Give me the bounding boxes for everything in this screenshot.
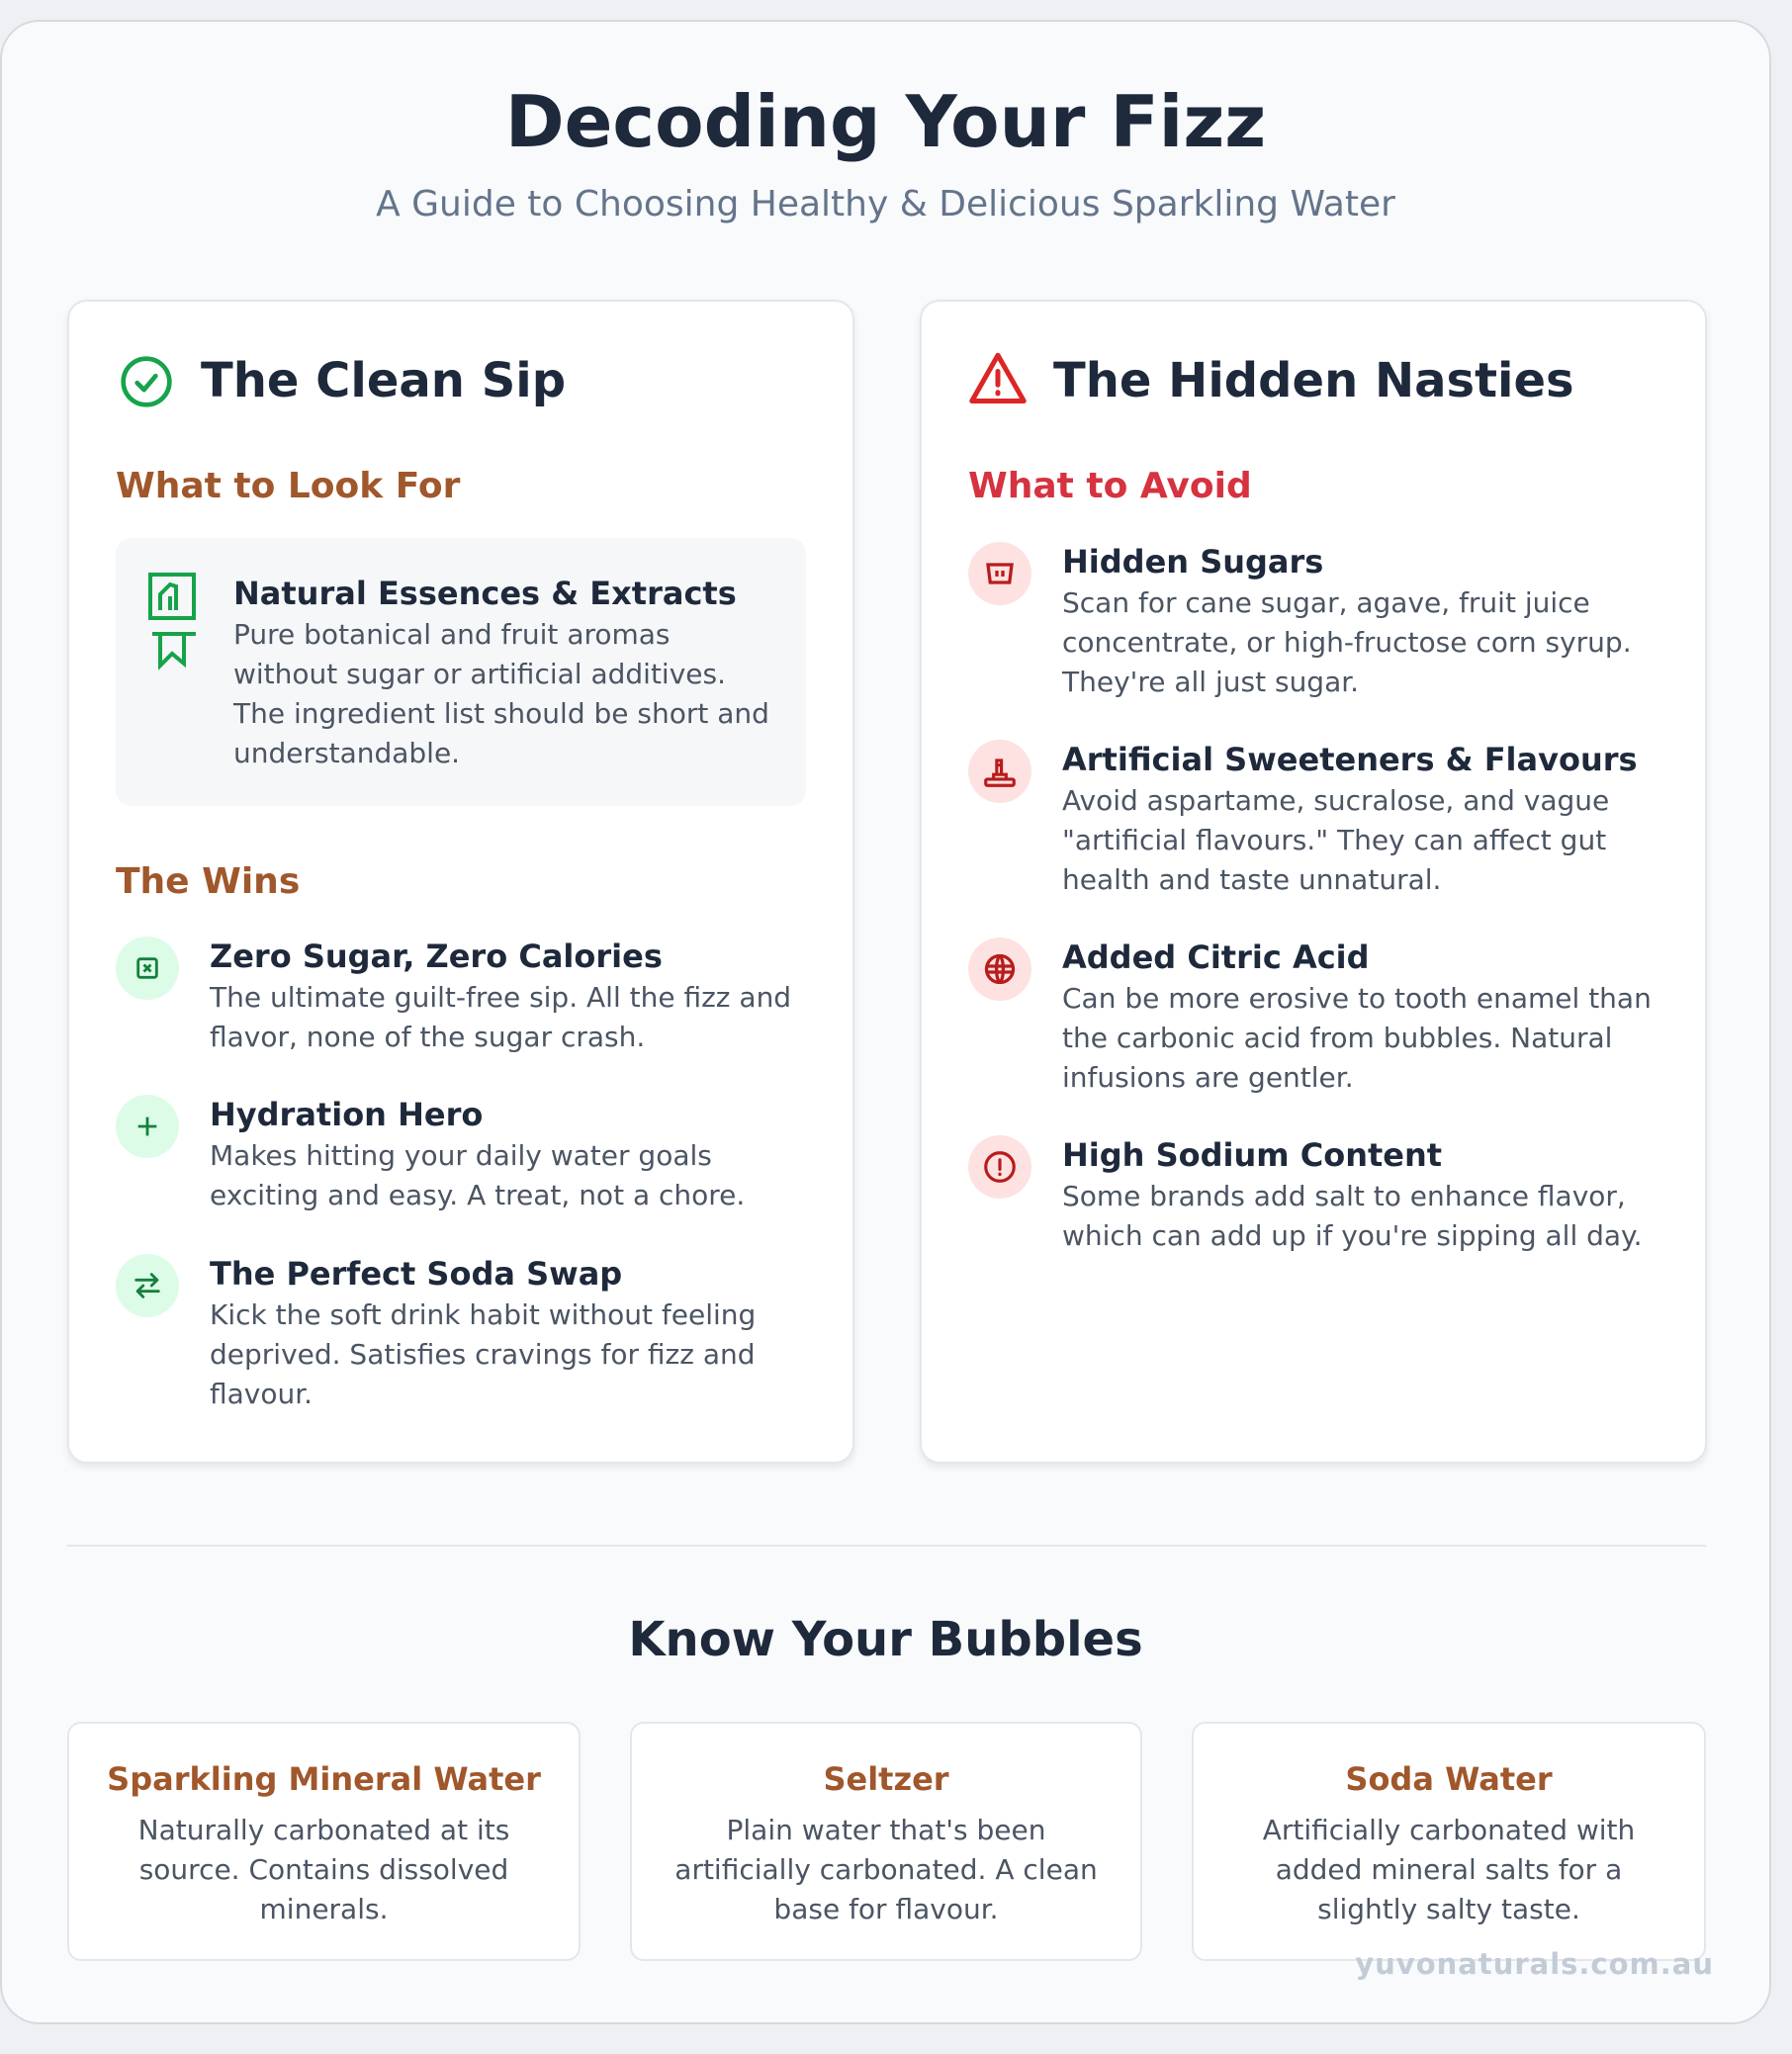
avoid: hidden sugars <box>968 542 1632 698</box>
icon: swap arrows <box>116 1254 179 1317</box>
icon: leaf bookmark <box>148 573 196 670</box>
subtitle: A Guide to Choosing Healthy & Delicious Sparkling Water <box>376 184 1395 224</box>
avoid: citric acid <box>968 938 1652 1094</box>
win: hydration hero: Hydration Hero <box>210 1096 483 1133</box>
subheading: what to avoid: What to Avoid <box>968 466 1252 506</box>
win: soda swap: Kick the soft drink habit without feeling deprived. Satisfies cravings for fizz and flavour. <box>210 1298 756 1410</box>
icon: x box <box>116 937 179 1000</box>
win: hydration hero: Makes hitting your daily water goals exciting and easy. A treat, not a chore. <box>210 1139 745 1211</box>
subheading: the wins: The Wins <box>116 861 300 902</box>
icon: basket <box>968 542 1031 605</box>
win: zero sugar: Zero Sugar, Zero Calories <box>210 938 663 975</box>
win: zero sugar: The ultimate guilt-free sip. All the fizz and flavor, none of the sugar crash. <box>210 981 791 1053</box>
win: zero sugar <box>116 937 791 1053</box>
icon: alert circle <box>968 1135 1031 1199</box>
card: seltzer: Plain water that's been artificially carbonated. A clean base for flavour. <box>674 1814 1098 1925</box>
avoid: hidden sugars: Scan for cane sugar, agave, fruit juice concentrate, or high-fructose corn syrup. They're all just sugar. <box>1062 586 1632 698</box>
win: soda swap <box>116 1254 756 1410</box>
avoid: sodium: High Sodium Content <box>1062 1136 1442 1174</box>
icon: plus <box>116 1095 179 1158</box>
win: soda swap: The Perfect Soda Swap <box>210 1255 622 1293</box>
avoid: artificial sweeteners <box>968 740 1638 896</box>
panel: hidden nasties <box>920 300 1707 1464</box>
heading: the clean sip: The Clean Sip <box>201 353 566 408</box>
icon: globe <box>968 938 1031 1001</box>
card: soda water: Artificially carbonated with added mineral salts for a slightly salty taste. <box>1263 1814 1635 1925</box>
avoid: citric acid: Can be more erosive to tooth enamel than the carbonic acid from bubbles. Natural infusions are gentler. <box>1062 982 1652 1094</box>
card: seltzer: Seltzer <box>823 1760 949 1798</box>
avoid: artificial sweeteners: Avoid aspartame, sucralose, and vague "artificial flavours." They can affect gut health and taste unnatural. <box>1062 784 1609 896</box>
panel: clean sip <box>67 300 854 1464</box>
item body: Pure botanical and fruit aromas without sugar or artificial additives. The ingredient list should be short and understandable. <box>233 618 769 769</box>
icon: dropper <box>968 740 1031 803</box>
icon: warning triangle <box>969 352 1027 403</box>
title: Decoding Your Fizz <box>505 80 1266 163</box>
win: hydration hero <box>116 1095 745 1211</box>
avoid: hidden sugars: Hidden Sugars <box>1062 543 1323 580</box>
card: sparkling mineral water: Sparkling Mineral Water <box>107 1760 541 1798</box>
card: soda water: Soda Water <box>1345 1760 1553 1798</box>
card: sparkling mineral water: Naturally carbonated at its source. Contains dissolved minerals. <box>138 1814 509 1925</box>
heading: know your bubbles: Know Your Bubbles <box>628 1612 1143 1667</box>
avoid: sodium: Some brands add salt to enhance flavor, which can add up if you're sipping all day. <box>1062 1180 1643 1252</box>
avoid: sodium <box>968 1135 1643 1252</box>
watermark: yuvonaturals.com.au <box>1355 1947 1714 1981</box>
avoid: artificial sweeteners: Artificial Sweeteners & Flavours <box>1062 741 1638 778</box>
item title: Natural Essences & Extracts <box>233 575 737 612</box>
heading: hidden nasties: The Hidden Nasties <box>1053 353 1574 408</box>
highlight box: natural essences <box>116 538 806 806</box>
avoid: citric acid: Added Citric Acid <box>1062 938 1370 976</box>
subheading: what to look for: What to Look For <box>116 466 460 506</box>
card: sparkling mineral water <box>67 1722 581 1961</box>
card: soda water <box>1192 1722 1706 1961</box>
icon: check circle <box>121 356 172 407</box>
card: seltzer <box>630 1722 1142 1961</box>
